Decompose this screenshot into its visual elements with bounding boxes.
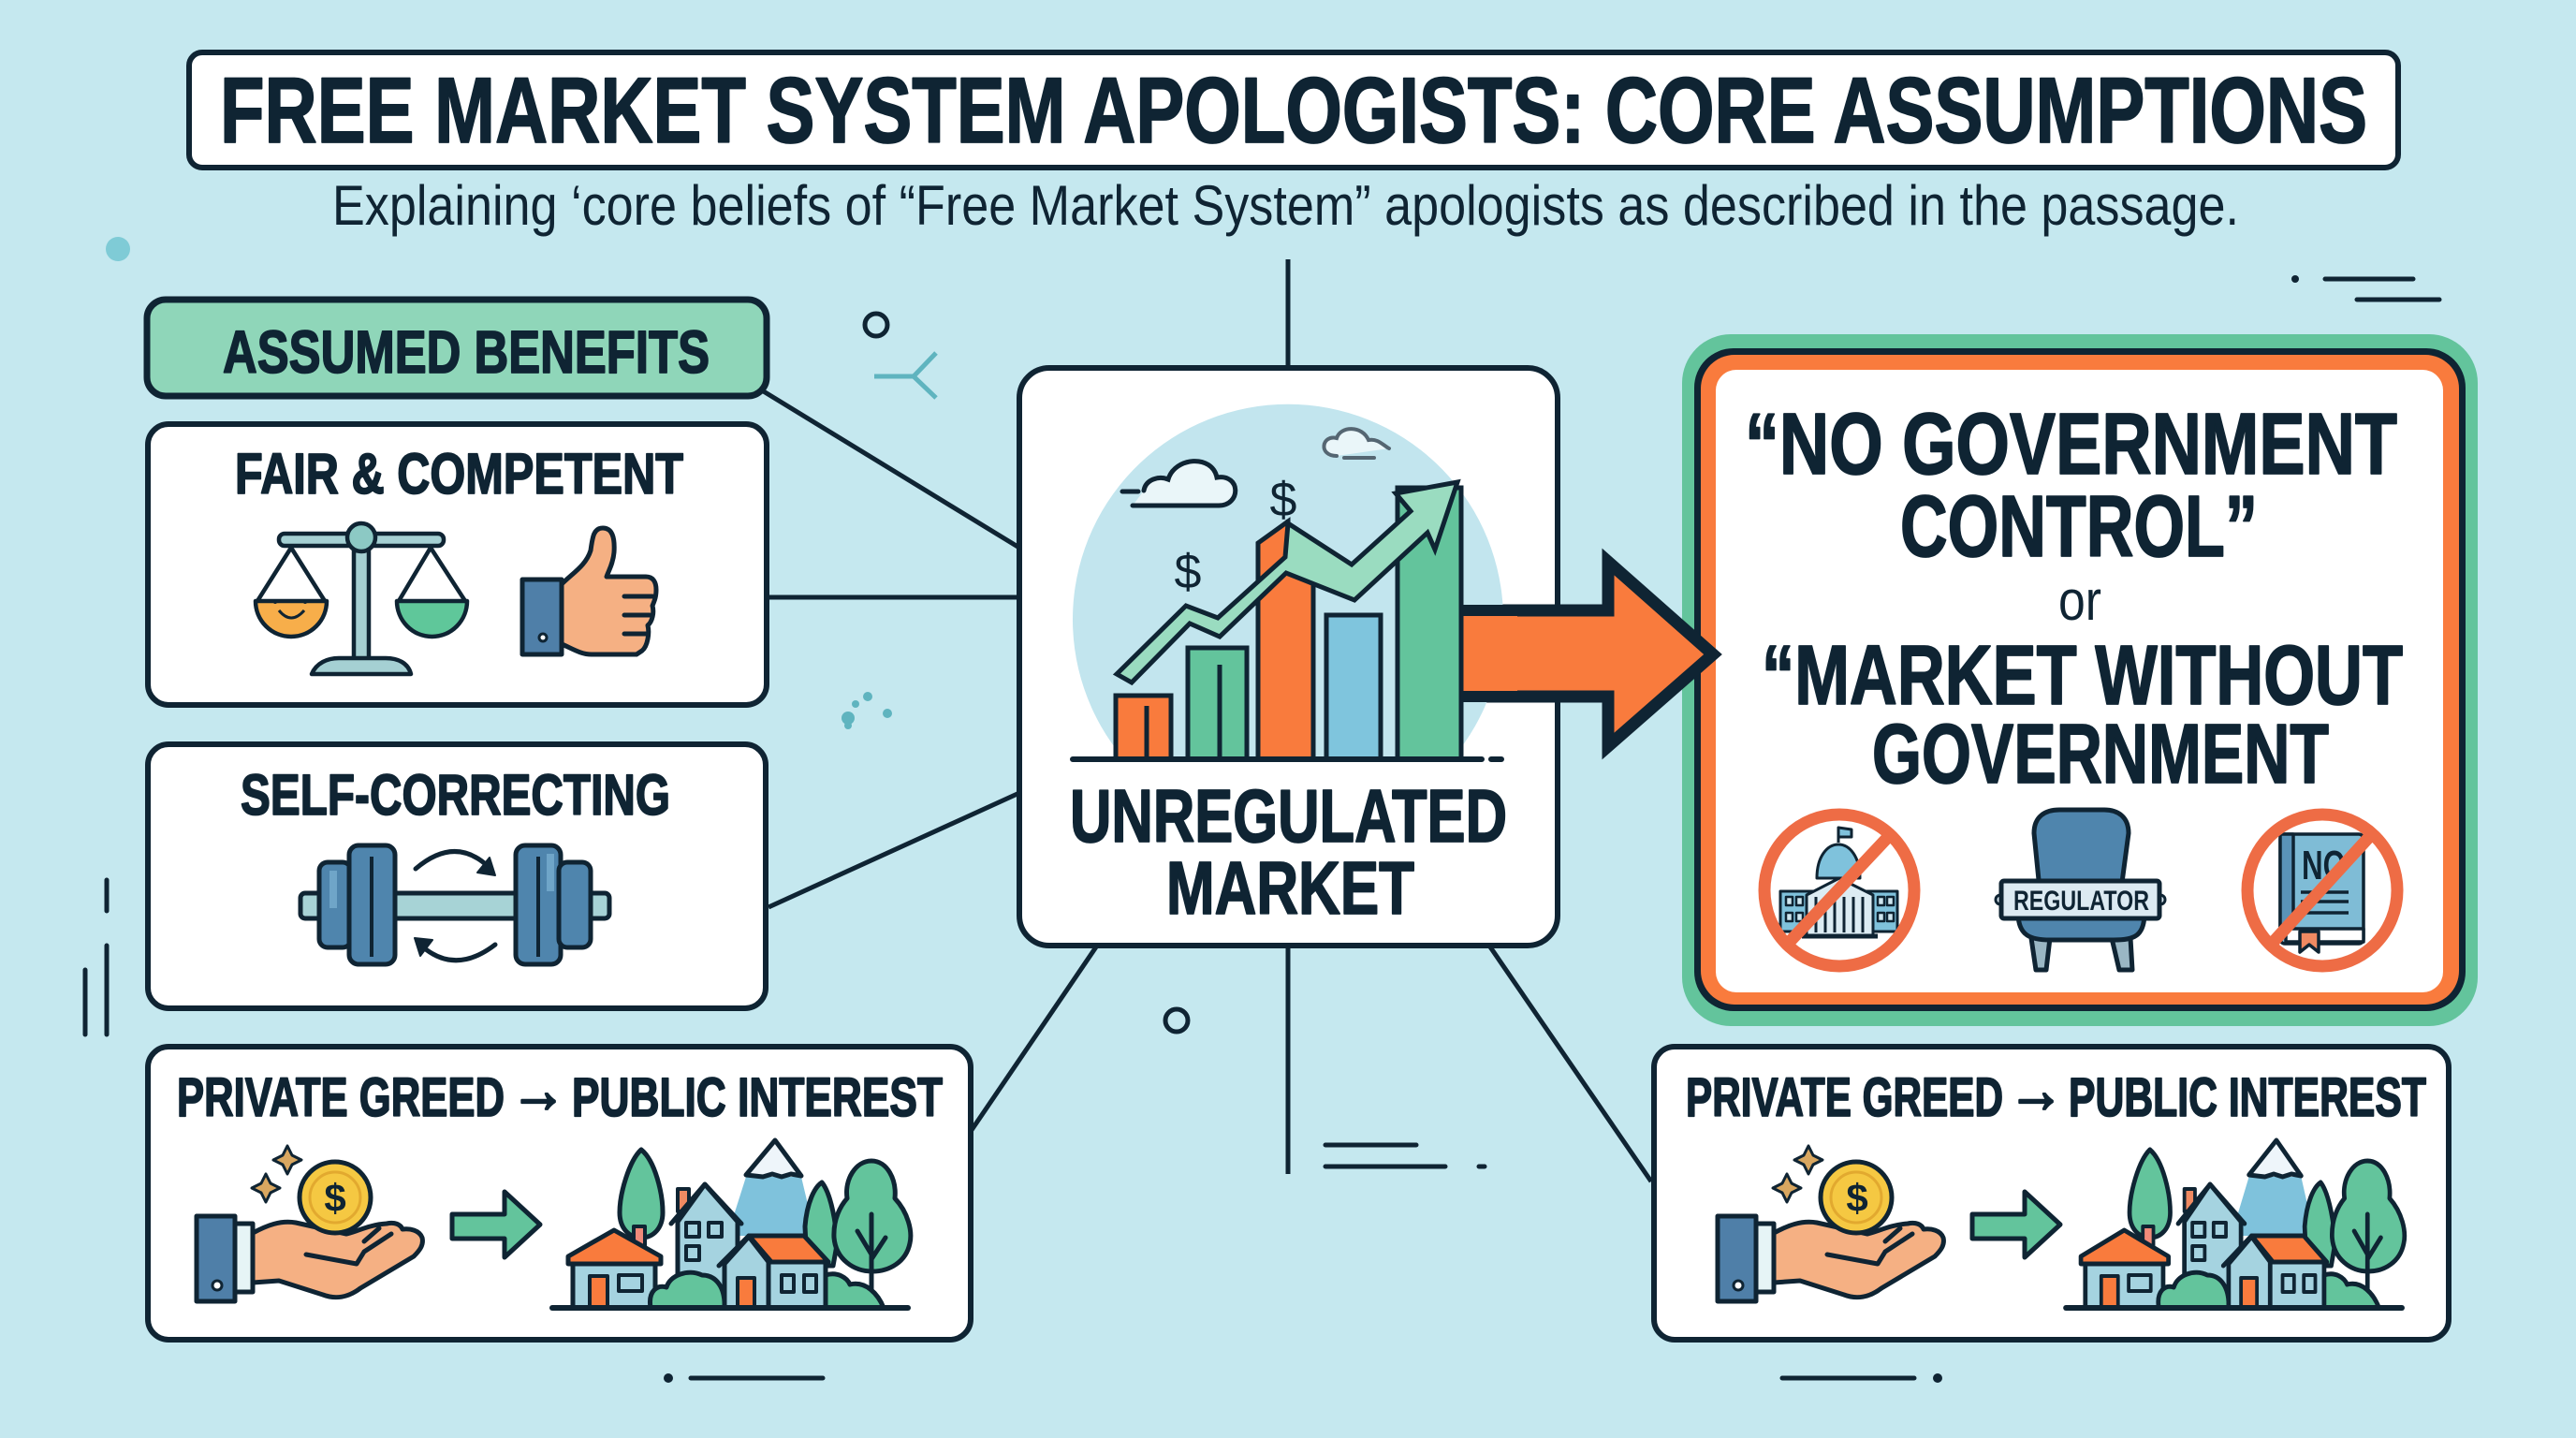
heading: private greed to public interest: PRIVATE GREED	[177, 1067, 505, 1128]
icon: dumbbell with cycle arrows	[300, 845, 609, 964]
panel: private greed right	[1654, 1047, 2449, 1340]
heading: unregulated market: MARKET	[1166, 846, 1414, 930]
panel: central unregulated market	[1019, 368, 1558, 946]
text: no government control: CONTROL”	[1900, 477, 2258, 575]
dollar signs: $	[1270, 473, 1297, 527]
label: no on book: NO	[2302, 843, 2346, 888]
dollar signs: $	[1175, 545, 1202, 599]
bars	[1116, 488, 1461, 759]
arrow: market to no government	[1456, 562, 1713, 746]
icon: town	[552, 1140, 911, 1308]
heading: unregulated market: UNREGULATED	[1070, 774, 1507, 858]
backdrop circle	[1073, 404, 1503, 759]
icon: hand holding coin: $	[324, 1176, 346, 1220]
panel: fair and competent	[148, 424, 767, 705]
heading: private greed to public interest repeat	[1686, 1053, 2426, 1128]
cloud left	[1122, 462, 1236, 506]
icon: balance scales	[256, 523, 467, 674]
text: no government control: “NO GOVERNMENT	[1745, 395, 2397, 492]
icon: town repeat	[2066, 1140, 2405, 1308]
icon: hand holding coin	[197, 1146, 422, 1301]
text: market without government	[1762, 629, 2403, 801]
dollar signs	[1175, 473, 1297, 599]
panel: self-correcting	[148, 744, 766, 1008]
heading: private greed to public interest	[177, 1053, 943, 1128]
connector lines	[762, 259, 1651, 1181]
icon: thumbs up	[522, 528, 656, 654]
trend arrow	[1117, 482, 1457, 682]
panel: no government control	[1682, 334, 2478, 1026]
baseline	[1073, 756, 1501, 762]
chart: rising market bars	[1073, 404, 1521, 759]
arrow: greed to public good repeat	[1972, 1192, 2060, 1257]
text: market without government: GOVERNMENT	[1872, 708, 2329, 801]
heading: private greed to public interest repeat: PRIVATE GREED	[1686, 1067, 2003, 1128]
icon: hand holding coin repeat: $	[1846, 1176, 1868, 1220]
text: or: or	[2058, 569, 2101, 632]
heading: private greed to public interest repeat: PUBLIC INTEREST	[2069, 1067, 2426, 1128]
text: market without government: “MARKET WITHOUT	[1762, 629, 2403, 723]
cloud right	[1324, 429, 1389, 458]
icon: no rule book	[2247, 814, 2397, 966]
label: regulator: REGULATOR	[2013, 886, 2149, 917]
decorative marks	[85, 237, 2439, 1383]
subtitle: Explaining ‘core beliefs of “Free Market System” apologists as described in the passage.	[332, 174, 2239, 237]
panel: assumed benefits heading: ASSUMED BENEFITS	[223, 318, 710, 386]
heading: self-correcting: SELF-CORRECTING	[241, 763, 670, 827]
heading: fair and competent: FAIR & COMPETENT	[235, 442, 683, 506]
arrow: greed to public good	[452, 1192, 540, 1257]
heading: private greed to public interest: →	[510, 1053, 566, 1126]
panel: assumed benefits heading	[147, 300, 767, 396]
panel: private greed left	[148, 1047, 971, 1340]
icon: regulator chair	[1996, 810, 2165, 970]
heading: private greed to public interest: PUBLIC INTEREST	[572, 1067, 943, 1128]
heading: unregulated market	[1070, 774, 1507, 930]
icon: no capitol building	[1764, 814, 1914, 966]
text: no government control	[1745, 395, 2397, 575]
heading: private greed to public interest repeat: →	[2008, 1053, 2064, 1126]
icon: hand holding coin repeat	[1718, 1146, 1943, 1301]
